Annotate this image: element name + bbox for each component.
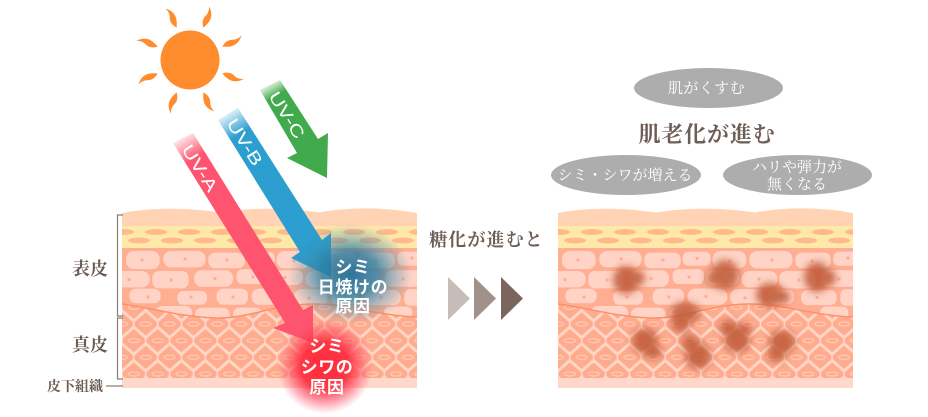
label: spot and wrinkle cause: シワの	[301, 358, 353, 377]
heading: skin aging progresses: 肌老化が進む	[639, 122, 775, 147]
skin diagram: left (UV exposure)	[112, 208, 431, 388]
bracket: dermis	[118, 318, 123, 379]
callout: more spots and wrinkles: シミ・シワが増える	[557, 167, 693, 184]
label: sunburn spot cause: シミ	[335, 258, 371, 277]
arrow: UV-B	[218, 108, 331, 277]
leader: subcutaneous	[106, 385, 123, 387]
label: spot and wrinkle cause: 原因	[309, 378, 345, 397]
label: dermis: 真皮	[72, 335, 108, 355]
arrow: UV-A	[173, 133, 313, 343]
heading: glycation progresses: 糖化が進むと	[429, 230, 544, 250]
bracket: epidermis	[118, 215, 123, 316]
label: spot and wrinkle cause: シミ	[309, 337, 345, 356]
arrow: UV-B: UV-B	[223, 115, 266, 169]
callout: loss of firmness: 無くなる	[767, 176, 827, 193]
callout: dull skin: 肌がくすむ	[668, 80, 745, 97]
callout: more spots and wrinkles	[551, 155, 701, 195]
callout: loss of firmness	[723, 155, 872, 195]
arrow: UV-C: UV-C	[265, 88, 308, 142]
skin diagram: right (aged skin)	[548, 208, 867, 388]
glow: blue spot	[288, 224, 412, 324]
callout: dull skin	[634, 68, 783, 108]
glow: red spot	[277, 318, 373, 414]
icon: sun	[136, 6, 244, 114]
label: epidermis: 表皮	[72, 259, 108, 279]
arrow: UV-C	[260, 80, 328, 178]
label: subcutaneous tissue: 皮下組織	[47, 378, 104, 395]
arrows: three chevrons	[448, 277, 523, 320]
label: sunburn spot cause: 日焼けの	[318, 277, 388, 297]
callout: loss of firmness: ハリや弾力が	[752, 159, 842, 176]
dark spots	[613, 260, 836, 369]
label: sunburn spot cause: 原因	[335, 297, 371, 316]
arrow: UV-A: UV-A	[178, 141, 222, 196]
